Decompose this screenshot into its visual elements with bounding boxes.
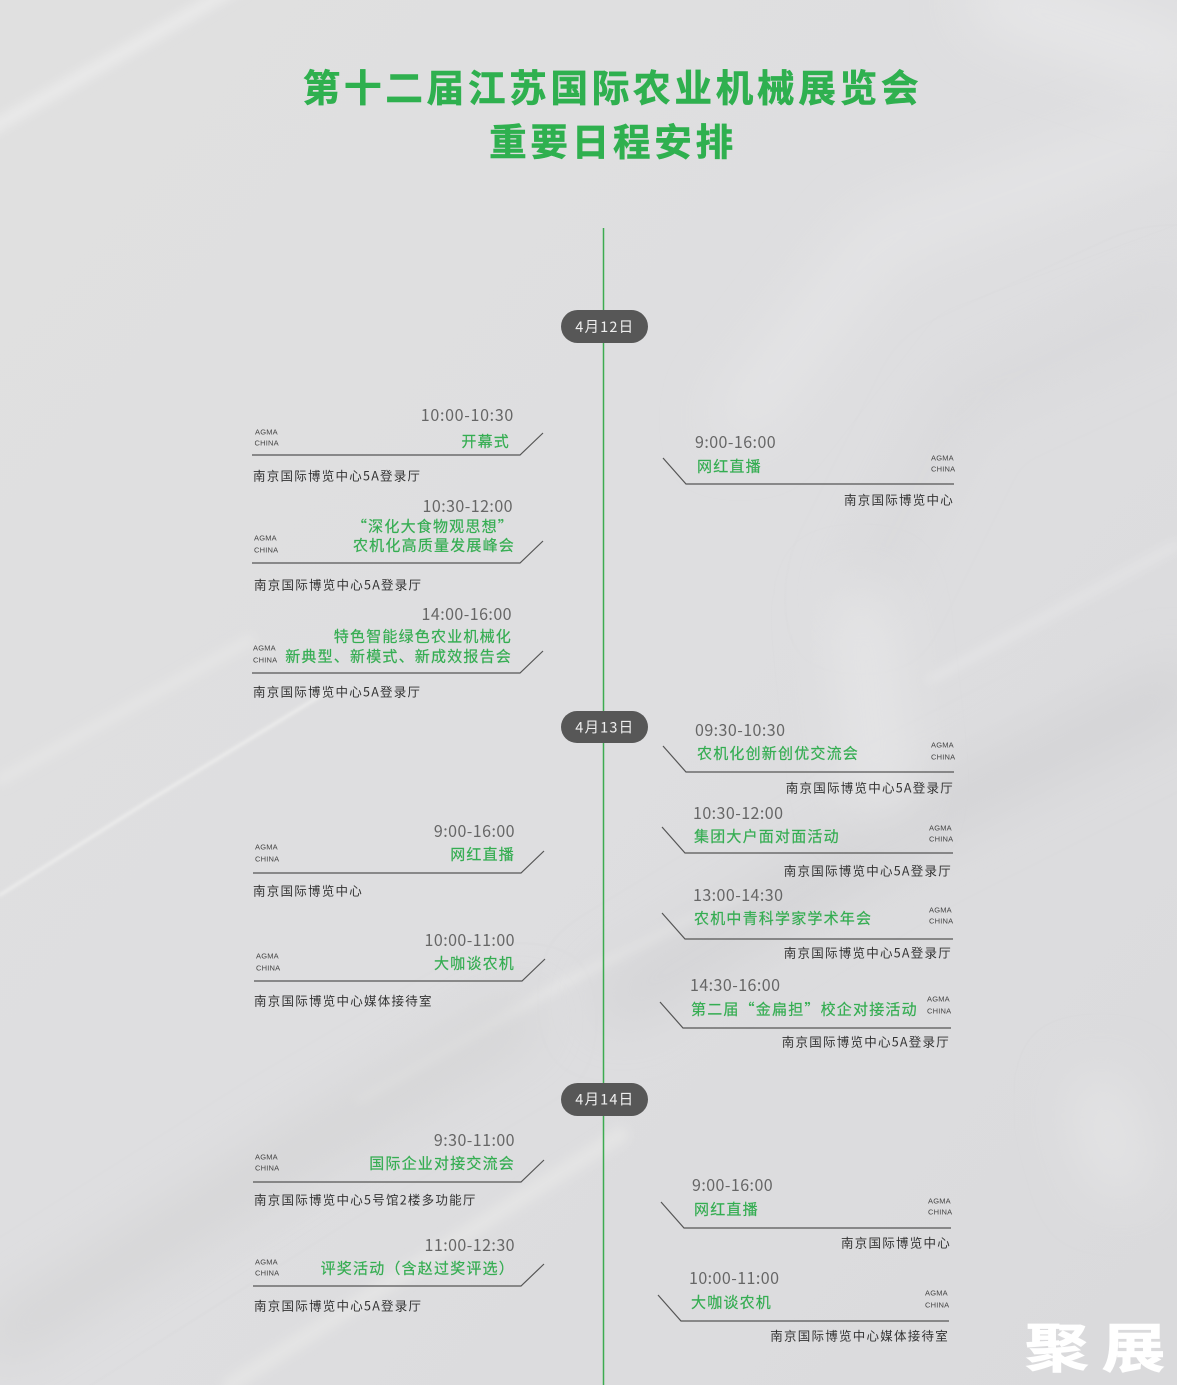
event: April 12 livestream: 网红直播 [697, 456, 762, 476]
event: April 12 livestream: 南京国际博览中心 [844, 490, 954, 508]
event: April 13 livestream: 南京国际博览中心 [253, 880, 363, 900]
event: opening ceremony: AGMA [255, 428, 278, 436]
event: awards: 11:00-12:30 [425, 1232, 515, 1256]
event: food concept summit: AGMA [254, 534, 277, 542]
event: opening ceremony: 开幕式 [461, 430, 510, 452]
event: awards: AGMA [255, 1258, 278, 1266]
event: international enterprise exchange [253, 1127, 544, 1208]
event: awards: CHINA [255, 1268, 279, 1278]
event: large farmers meeting: 南京国际博览中心5A登录厅 [784, 860, 952, 880]
event: April 13 expert talk [254, 927, 545, 1010]
event: April 14 expert talk: CHINA [925, 1300, 949, 1310]
event: April 14 expert talk: 10:00-11:00 [689, 1265, 779, 1289]
event: food concept summit: 10:30-12:00 [423, 493, 513, 517]
event: golden shoulder pole: 14:30-16:00 [690, 972, 780, 996]
event: awards [253, 1232, 544, 1314]
event: April 13 expert talk: CHINA [256, 964, 280, 972]
event: specialty smart machinery report: CHINA [253, 656, 277, 664]
event: specialty smart machinery report: 特色智能绿色农业机械化 [334, 626, 512, 646]
event: food concept summit: “深化大食物观思想” [352, 516, 514, 536]
event: young scientists conference: 农机中青科学家学术年会 [694, 908, 872, 928]
event: April 13 livestream: 9:00-16:00 [434, 818, 515, 842]
event: April 12 livestream [663, 429, 955, 508]
event: April 13 expert talk: 南京国际博览中心媒体接待室 [254, 990, 433, 1010]
event: large farmers meeting: AGMA [929, 824, 952, 832]
event: international enterprise exchange: CHINA [255, 1164, 279, 1172]
event: innovation exchange [663, 717, 955, 796]
date pill: April 13 [561, 711, 648, 743]
event: April 13 livestream [253, 818, 544, 900]
title: 重要日程安排 [489, 112, 737, 166]
event: specialty smart machinery report: 14:00-16:00 [422, 601, 512, 625]
event: international enterprise exchange: AGMA [255, 1152, 278, 1162]
event: April 14 livestream: 网红直播 [694, 1198, 759, 1220]
event: innovation exchange: AGMA [931, 740, 954, 750]
event: innovation exchange: CHINA [931, 752, 955, 762]
event: April 14 livestream [661, 1172, 952, 1252]
event: April 13 livestream: AGMA [255, 842, 278, 852]
event: young scientists conference: 13:00-14:30 [693, 882, 783, 906]
event: opening ceremony: 10:00-10:30 [421, 402, 514, 426]
event: April 14 livestream: 南京国际博览中心 [841, 1232, 951, 1252]
event: April 12 livestream: 9:00-16:00 [695, 429, 776, 453]
event: food concept summit: CHINA [254, 546, 278, 554]
event: large farmers meeting: 10:30-12:00 [693, 800, 783, 824]
event: awards: 评奖活动（含赵过奖评选） [321, 1258, 515, 1278]
event: April 14 expert talk: 南京国际博览中心媒体接待室 [770, 1326, 949, 1344]
event: April 12 livestream: CHINA [931, 464, 955, 474]
watermark logo: 聚展 [1025, 1306, 1177, 1382]
event: specialty smart machinery report: 南京国际博览中心5A登录厅 [253, 682, 421, 700]
event: April 14 livestream: 9:00-16:00 [692, 1172, 773, 1196]
event: April 13 expert talk: AGMA [256, 952, 279, 960]
event: specialty smart machinery report: AGMA [253, 644, 276, 652]
event: food concept summit [252, 493, 543, 594]
event: international enterprise exchange: 9:30-11:00 [434, 1127, 515, 1151]
event: international enterprise exchange: 南京国际博览中心5号馆2楼多功能厅 [254, 1190, 477, 1208]
event: large farmers meeting [662, 800, 953, 880]
event: innovation exchange: 南京国际博览中心5A登录厅 [786, 778, 954, 796]
event: April 12 livestream: AGMA [931, 454, 954, 462]
event: international enterprise exchange: 国际企业对接交流会 [369, 1152, 515, 1174]
event: opening ceremony [252, 402, 543, 484]
date pill: April 12 [561, 310, 648, 343]
event: April 13 livestream: 网红直播 [450, 844, 515, 864]
event: April 14 expert talk: 大咖谈农机 [691, 1292, 772, 1312]
event: April 13 expert talk: 10:00-11:00 [425, 927, 515, 951]
event: April 14 livestream: AGMA [928, 1196, 951, 1206]
event: specialty smart machinery report: 新典型、新模式、新成效报告会 [285, 646, 512, 666]
event: awards: 南京国际博览中心5A登录厅 [254, 1296, 422, 1314]
event: April 14 livestream: CHINA [928, 1208, 952, 1216]
title: 第十二届江苏国际农业机械展览会 [303, 58, 922, 112]
event: innovation exchange: 09:30-10:30 [695, 717, 785, 741]
timeline axis [602, 228, 604, 1385]
event: golden shoulder pole: CHINA [927, 1006, 951, 1016]
event: April 14 expert talk [658, 1265, 949, 1344]
event: golden shoulder pole: AGMA [927, 994, 950, 1004]
event: young scientists conference: AGMA [929, 906, 952, 914]
event: April 13 expert talk: 大咖谈农机 [434, 952, 515, 974]
event: innovation exchange: 农机化创新创优交流会 [697, 742, 859, 764]
event: opening ceremony: 南京国际博览中心5A登录厅 [253, 466, 421, 484]
event: young scientists conference: CHINA [929, 916, 953, 926]
event: large farmers meeting: 集团大户面对面活动 [694, 826, 840, 846]
event: young scientists conference: 南京国际博览中心5A登录厅 [784, 942, 952, 962]
event: specialty smart machinery report [252, 601, 543, 700]
event: large farmers meeting: CHINA [929, 834, 953, 844]
event: opening ceremony: CHINA [254, 438, 279, 448]
date pill: April 13: 4月13日 [575, 716, 634, 738]
event: young scientists conference [662, 882, 953, 962]
title [303, 58, 922, 166]
event: golden shoulder pole: 第二届“金扁担”校企对接活动 [691, 998, 918, 1020]
event: April 14 expert talk: AGMA [925, 1288, 948, 1298]
event: food concept summit: 农机化高质量发展峰会 [353, 534, 515, 556]
event: April 13 livestream: CHINA [255, 854, 279, 864]
date pill: April 14 [561, 1083, 648, 1116]
event: golden shoulder pole [660, 972, 951, 1050]
date pill: April 14: 4月14日 [575, 1088, 634, 1110]
date pill: April 12: 4月12日 [575, 316, 634, 337]
event: food concept summit: 南京国际博览中心5A登录厅 [254, 574, 422, 594]
event: golden shoulder pole: 南京国际博览中心5A登录厅 [782, 1032, 950, 1050]
